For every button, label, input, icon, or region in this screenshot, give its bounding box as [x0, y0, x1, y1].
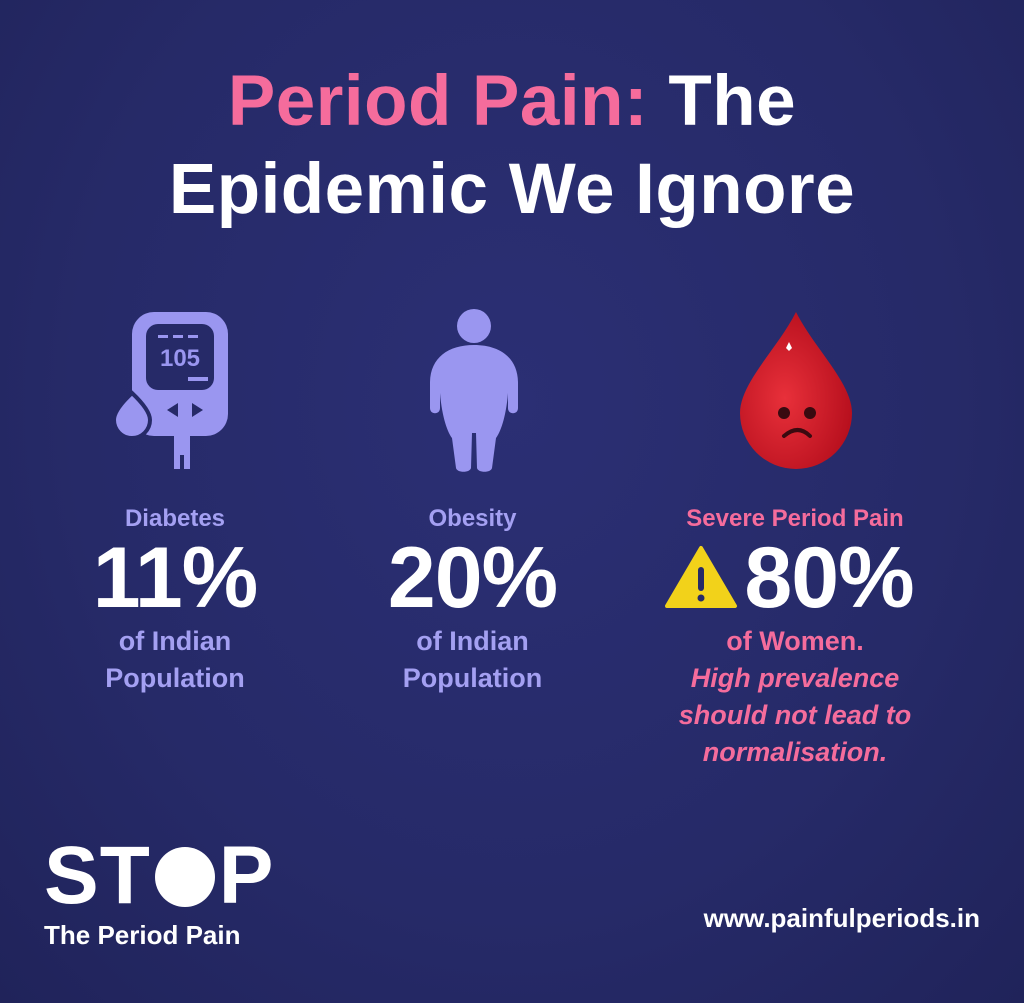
column: diabetes [93, 505, 257, 693]
column: diabetes: of Indian [119, 626, 231, 656]
icon: obese person [430, 309, 518, 472]
icon: glucose meter [116, 312, 228, 469]
column: diabetes: Population [105, 663, 245, 693]
logo: STOP The Period Pain: ST P [44, 830, 274, 921]
website url: www.painfulperiods.in [704, 903, 980, 933]
column: severe period pain: 80% [744, 530, 914, 626]
icon: glucose meter: 105 [160, 345, 200, 372]
column: severe period pain: High prevalence [691, 663, 899, 693]
column: severe period pain [665, 505, 914, 767]
icon: sad blood drop [740, 312, 852, 469]
column: obesity [388, 505, 557, 693]
column: obesity: of Indian [416, 626, 529, 656]
title: Period Pain: The [228, 62, 796, 141]
column: diabetes: 11% [93, 530, 257, 626]
column: obesity: 20% [388, 530, 557, 626]
column: severe period pain: should not lead to [679, 700, 911, 730]
title [169, 62, 855, 229]
title: Epidemic We Ignore [169, 150, 855, 229]
column: diabetes: Diabetes [125, 505, 225, 532]
column: severe period pain: of Women. [726, 626, 864, 656]
column: obesity: Obesity [428, 505, 517, 532]
column: severe period pain: normalisation. [703, 737, 887, 767]
column: severe period pain: Severe Period Pain [686, 505, 904, 532]
column: obesity: Population [403, 663, 542, 693]
logo: STOP The Period Pain: The Period Pain [44, 920, 240, 950]
